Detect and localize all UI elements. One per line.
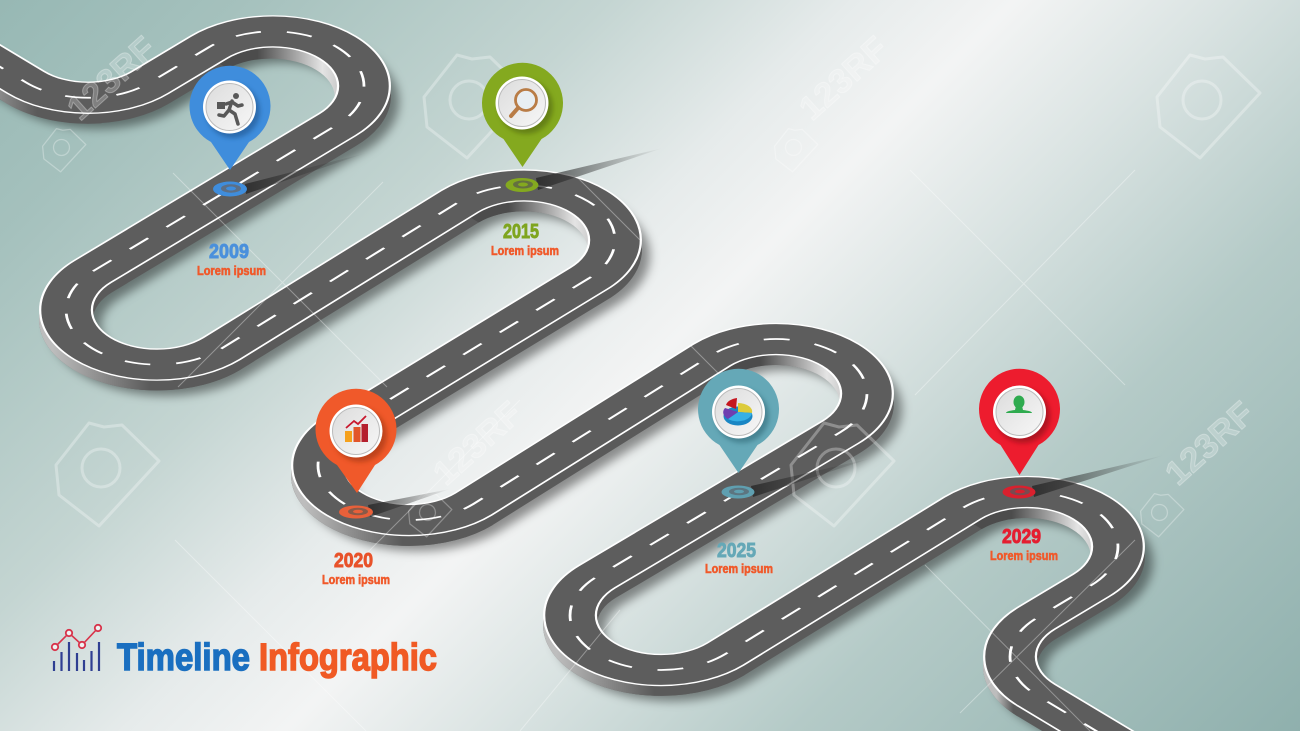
watermark 3 [775,129,818,172]
pin 2020 [316,389,396,493]
milestone 2015 [482,63,563,258]
watermark 1 [43,129,86,172]
watermark 7 [791,423,894,526]
watermark 2 [424,55,527,158]
watermarks [43,29,1261,537]
title: Timeline: Timeline [117,637,250,679]
watermark text 3: 123RF [792,29,895,128]
target marker 2020 [339,506,373,518]
shadow 2009 [245,153,366,194]
shadow 2029 [1032,455,1165,497]
shadow 2015 [536,148,663,190]
milestone 2009 [189,66,270,278]
shadow 2020 [368,489,450,517]
shadow 2025 [751,458,872,497]
target marker 2009 [213,182,247,196]
watermark text 6: 123RF [426,394,529,493]
target marker 2029 [1002,486,1036,498]
watermark 5 [56,423,159,526]
caption 2025: Lorem ipsum [705,561,773,576]
year 2015: 2015 [503,221,539,243]
watermark 8 [1141,494,1184,537]
pin 2025 [698,369,779,473]
year 2029: 2029 [1002,526,1041,548]
watermark 4 [1157,55,1260,158]
icon: pie chart [723,398,752,426]
icon: magnifier [511,90,536,116]
icon: person [1006,396,1032,413]
year 2025: 2025 [717,540,756,562]
icon: chart logo [52,625,101,671]
icon: rising bar chart [345,416,368,442]
year 2020: 2020 [334,550,373,572]
icon: runner [217,93,242,124]
pin 2015 [482,63,563,167]
caption 2029: Lorem ipsum [990,548,1058,563]
title: Infographic: Infographic [259,637,437,679]
caption 2020: Lorem ipsum [322,572,390,587]
milestone 2029 [979,369,1060,563]
long shadows [245,148,1165,517]
watermark text 8: 123RF [1158,394,1261,493]
milestone 2020 [316,389,396,587]
target marker 2015 [506,178,538,192]
caption 2015: Lorem ipsum [491,243,559,258]
pin 2009 [189,66,270,170]
milestone 2025 [698,369,779,576]
year 2009: 2009 [209,241,249,263]
caption 2009: Lorem ipsum [197,263,266,278]
watermark 6 [409,494,452,537]
light rays [173,170,1135,731]
title block [52,625,437,679]
watermark text 1: 123RF [60,29,163,128]
pin 2029 [979,369,1060,475]
wall shading [0,50,1104,711]
target marker 2025 [722,486,754,498]
